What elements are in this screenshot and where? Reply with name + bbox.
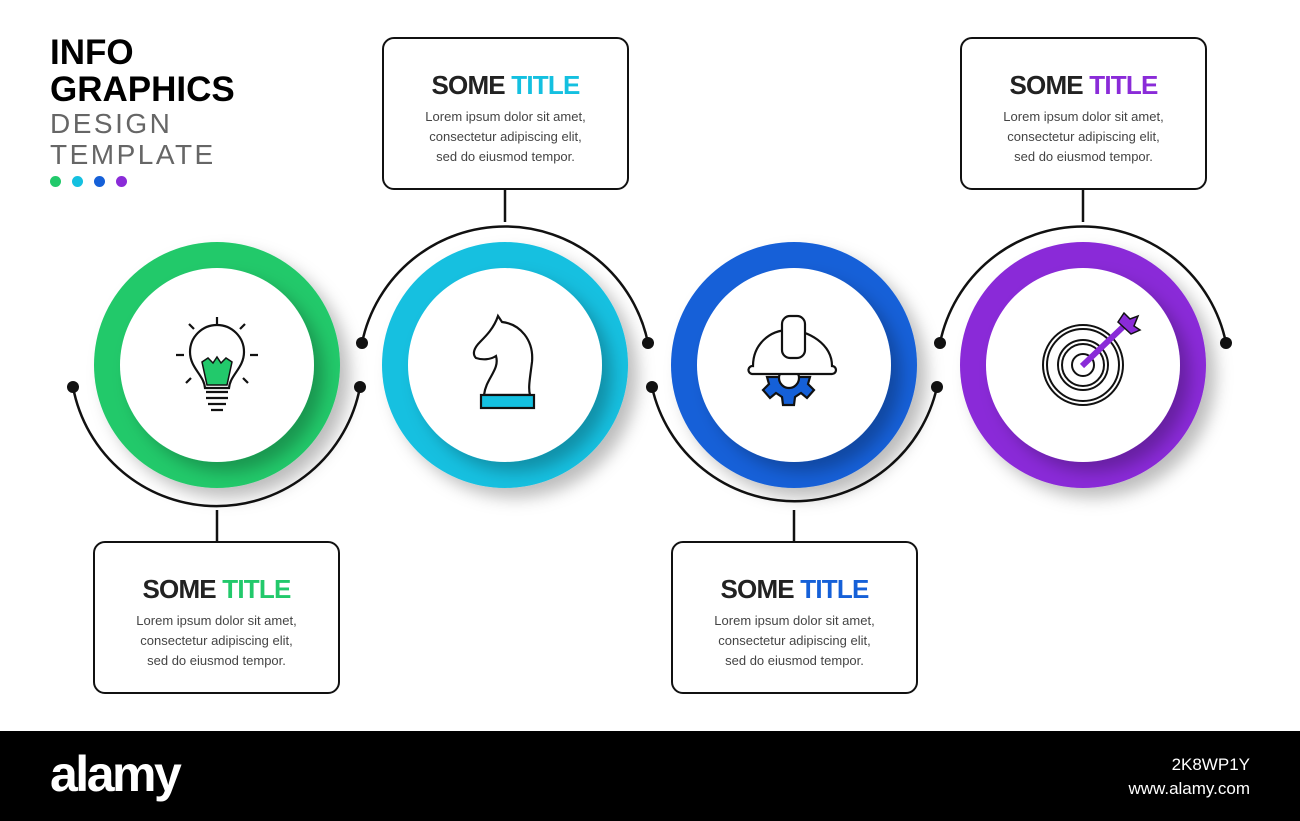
footer: www.alamy.com bbox=[1128, 779, 1250, 798]
footer bbox=[0, 731, 1300, 821]
box 4: consectetur adipiscing elit, bbox=[1007, 129, 1160, 144]
color dots bbox=[50, 176, 127, 187]
title: TEMPLATE bbox=[50, 139, 216, 170]
box 1: consectetur adipiscing elit, bbox=[140, 633, 293, 648]
icon: target bbox=[1043, 313, 1140, 405]
box 3: sed do eiusmod tempor. bbox=[725, 653, 864, 668]
box 2: SOME TITLE bbox=[431, 70, 580, 100]
title: INFO bbox=[50, 33, 134, 72]
box 2 bbox=[382, 37, 629, 190]
box 2: Lorem ipsum dolor sit amet, bbox=[425, 109, 586, 124]
circle 2 bbox=[382, 242, 628, 488]
box 4: SOME TITLE bbox=[1009, 70, 1158, 100]
box 3: SOME TITLE bbox=[720, 574, 868, 604]
box 3: consectetur adipiscing elit, bbox=[718, 633, 871, 648]
icon: helmet gear bbox=[748, 316, 836, 405]
title: GRAPHICS bbox=[50, 70, 235, 109]
title: DESIGN bbox=[50, 108, 172, 139]
box 1: sed do eiusmod tempor. bbox=[147, 653, 286, 668]
icon: chess knight bbox=[474, 316, 534, 408]
box 3 bbox=[671, 541, 918, 694]
box 3: Lorem ipsum dolor sit amet, bbox=[714, 613, 875, 628]
box 1: Lorem ipsum dolor sit amet, bbox=[136, 613, 297, 628]
box 2: sed do eiusmod tempor. bbox=[436, 149, 575, 164]
icon: lightbulb bbox=[176, 317, 258, 410]
footer: alamy bbox=[50, 746, 179, 802]
circle 1 bbox=[94, 242, 340, 488]
footer: 2K8WP1Y bbox=[1172, 755, 1250, 774]
box 4: sed do eiusmod tempor. bbox=[1014, 149, 1153, 164]
title bbox=[50, 33, 235, 187]
box 2: consectetur adipiscing elit, bbox=[429, 129, 582, 144]
box 4 bbox=[960, 37, 1207, 190]
circle 4 bbox=[960, 242, 1206, 488]
box 1: SOME TITLE bbox=[142, 574, 290, 604]
box 1 bbox=[93, 541, 340, 694]
box 4: Lorem ipsum dolor sit amet, bbox=[1003, 109, 1164, 124]
circle 3 bbox=[671, 242, 917, 488]
